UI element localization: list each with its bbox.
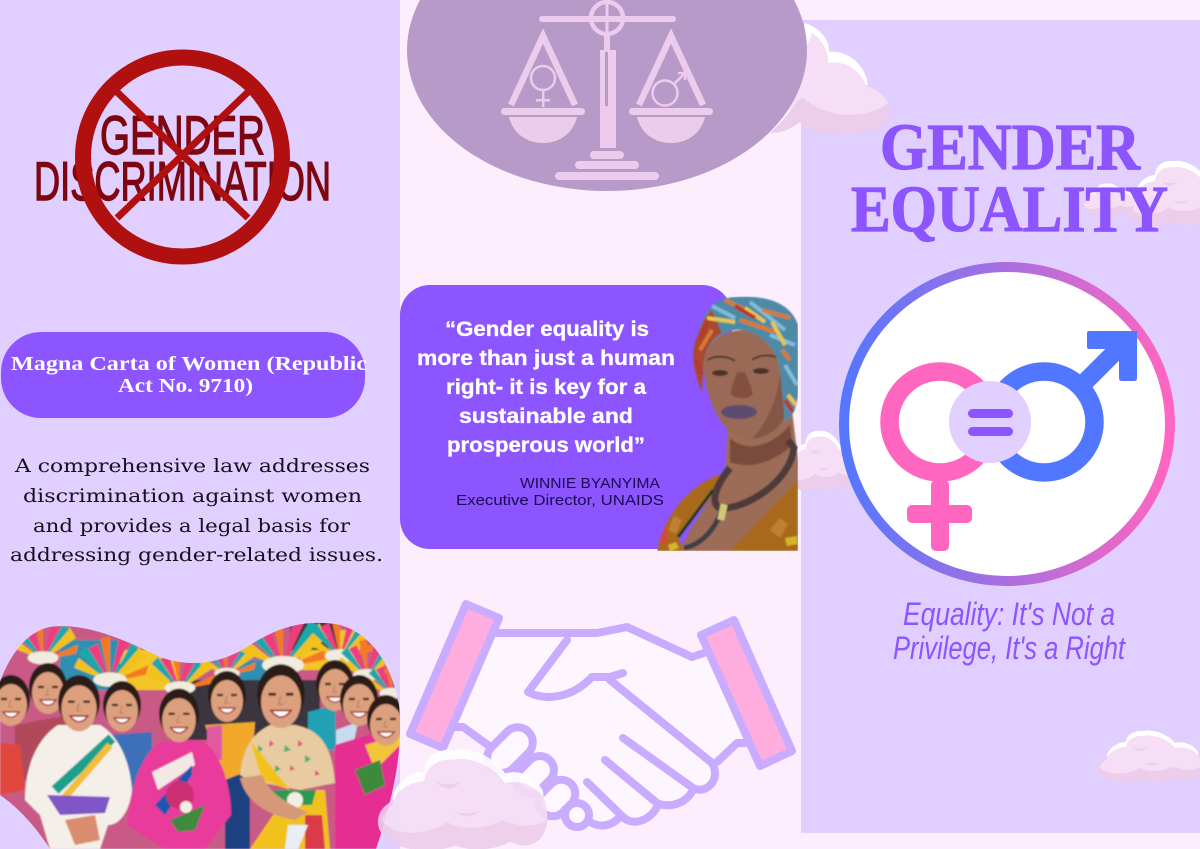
photo: crowd of women in colourful dress [0, 611, 421, 849]
handshake icon [410, 604, 792, 830]
tagline: Equality: It's Not a [903, 596, 1115, 632]
quote attribution: WINNIE BYANYIMA [520, 475, 660, 492]
discrimination heading: DISCRIMINATION [34, 150, 331, 212]
body text: law description: and provides a legal basis for [33, 515, 351, 537]
magna carta pill [1, 332, 367, 418]
female symbol [890, 372, 990, 551]
body text: law description: discrimination against women [23, 485, 362, 507]
photo: portrait of Winnie Byanyima [657, 297, 798, 551]
scales of justice emblem [407, 0, 807, 191]
emblem background ellipse [407, 0, 807, 191]
quote card [400, 285, 732, 549]
equals disc [949, 381, 1031, 463]
pill heading text: Act No. 9710) [118, 375, 253, 397]
cloud: behind portrait [786, 431, 858, 490]
hand outlines [453, 627, 747, 826]
main title: gender equality: GENDER [880, 111, 1141, 184]
cloud: lower right [1098, 731, 1200, 782]
gender equality badge [844, 267, 1170, 581]
male symbol [994, 331, 1137, 472]
quote text: more than just a human [417, 347, 675, 370]
quote text: sustainable and [459, 405, 633, 428]
cloud: top right [770, 23, 890, 134]
right pan with male symbol [629, 36, 713, 143]
banned gender discrimination icon [34, 58, 331, 256]
right cuff [701, 620, 792, 766]
quote text: right- it is key for a [446, 376, 646, 399]
cloud: over handshake lower left [378, 749, 547, 849]
main title: gender equality: EQUALITY [851, 173, 1168, 246]
body text: law description: addressing gender-related issues. [10, 544, 383, 566]
left pan with female symbol [501, 36, 585, 143]
hand fill [453, 627, 747, 830]
cloud: beside title [1127, 161, 1200, 226]
panel: left column [0, 0, 400, 849]
prohibition ring and cross [83, 58, 282, 256]
body text: law description: A comprehensive law addresses [14, 455, 370, 477]
panel: right column [801, 20, 1200, 833]
cloud: small beside title [1083, 183, 1134, 214]
pill heading text: Magna Carta of Women (Republic [11, 353, 367, 375]
gradient ring [844, 267, 1170, 581]
quote attribution: Executive Director, UNAIDS [456, 492, 664, 509]
gripping fingers [481, 721, 589, 827]
quote text: prosperous world” [447, 434, 645, 457]
tagline: Privilege, It's a Right [893, 630, 1126, 666]
scale stand and beam [539, 2, 676, 180]
gender heading: GENDER [100, 104, 265, 166]
quote text: “Gender equality is [445, 318, 649, 341]
left cuff [410, 604, 499, 748]
